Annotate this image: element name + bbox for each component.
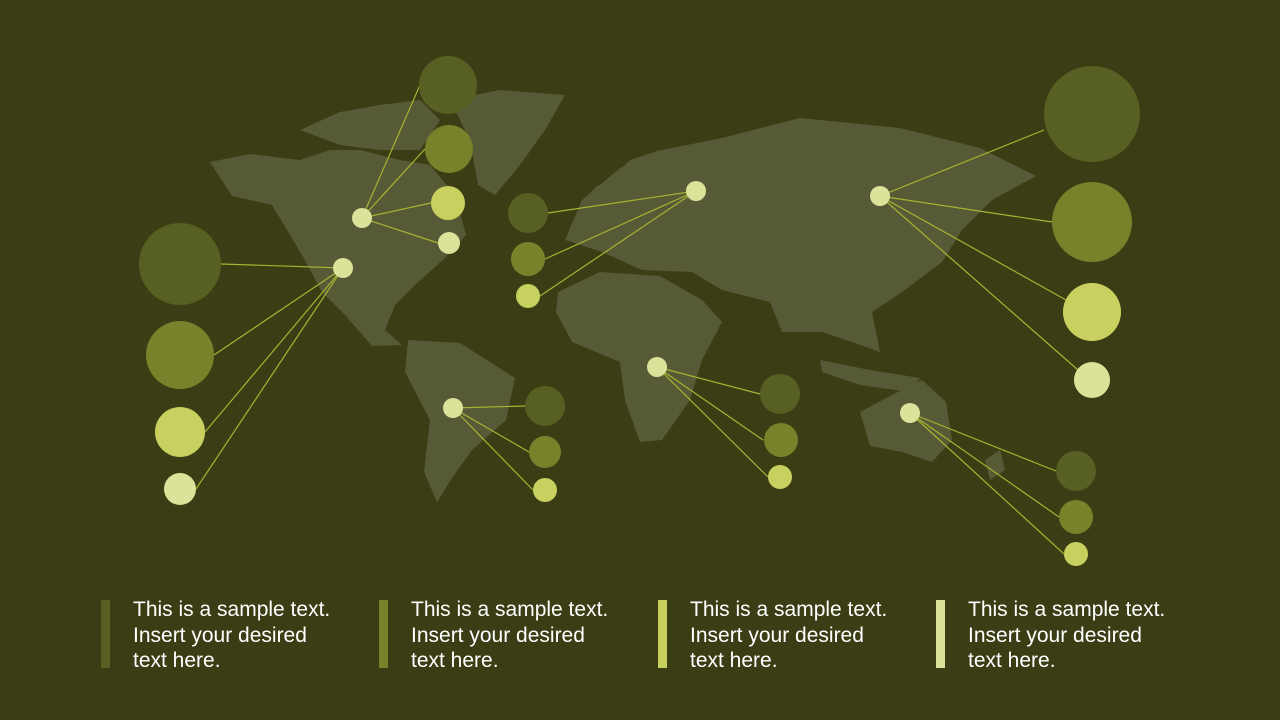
scandinavia [610, 150, 680, 200]
caption 1: This is a sample text. [133, 598, 330, 621]
indonesia [820, 360, 920, 392]
caption 1: text here. [133, 649, 221, 672]
caption 2: Insert your desired [411, 624, 585, 646]
circles: asia [870, 66, 1140, 398]
caption 4: This is a sample text. [968, 598, 1165, 621]
caption 1: Insert your desired [133, 624, 307, 646]
circles: australia [900, 403, 1096, 566]
north america [210, 150, 466, 346]
australia [860, 380, 952, 462]
eurasia [565, 118, 1036, 352]
africa [556, 272, 722, 442]
map: continents [210, 90, 1036, 502]
caption 2 [379, 598, 608, 672]
circles: north america east [352, 56, 477, 254]
caption 4: Insert your desired [968, 624, 1142, 646]
uk [588, 185, 604, 215]
caption 2: text here. [411, 649, 499, 672]
circles: south america [443, 386, 565, 502]
caption 2: This is a sample text. [411, 598, 608, 621]
caption 4 [936, 598, 1165, 672]
caption 1 [101, 598, 330, 672]
circles: europe [508, 181, 706, 308]
connector lines [196, 85, 1078, 554]
circles: africa [647, 357, 800, 489]
caption 3: This is a sample text. [690, 598, 887, 621]
circles: north america west [139, 223, 353, 505]
caption 3: text here. [690, 649, 778, 672]
south america [405, 340, 515, 502]
caption 4: text here. [968, 649, 1056, 672]
caption 3 [658, 598, 887, 672]
caption 3: Insert your desired [690, 624, 864, 646]
greenland [450, 90, 565, 195]
arctic islands [300, 100, 440, 150]
